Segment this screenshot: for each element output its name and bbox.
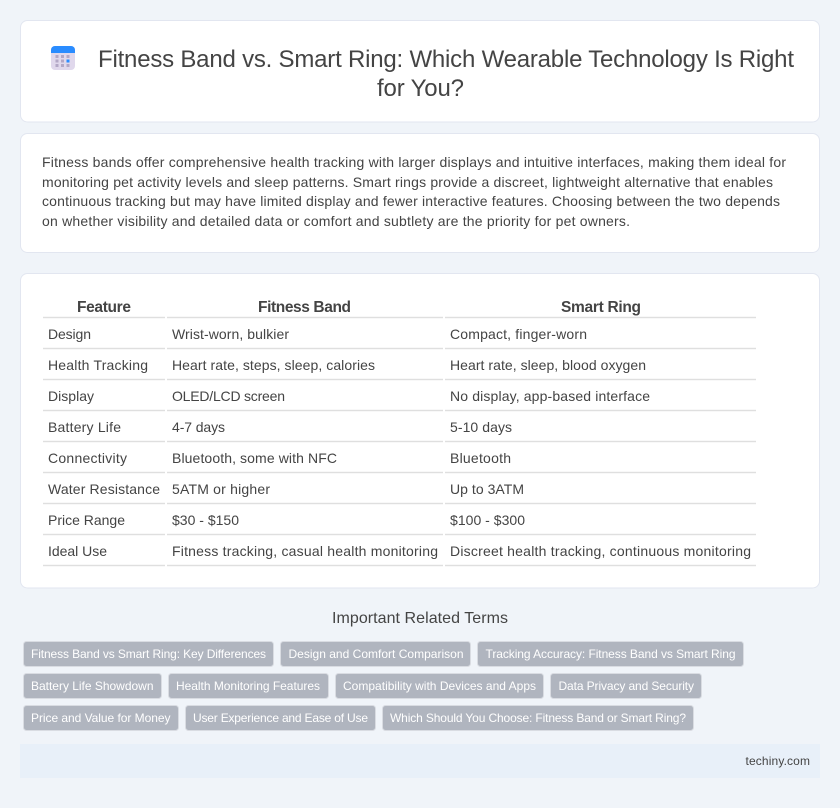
- row: health tracking: [48, 357, 646, 373]
- tag: [24, 706, 178, 730]
- tag: [186, 706, 376, 730]
- row: health tracking: Heart rate, sleep, blood oxygen: [450, 357, 646, 373]
- text block: introduction: monitoring pet activity levels and sleep patterns. Smart rings provide a discreet, lightweight alternative that enables: [42, 174, 773, 190]
- row: health tracking: Health Tracking: [48, 357, 148, 373]
- tag: [478, 642, 744, 666]
- panel: related term tags: [24, 642, 744, 730]
- heading: important related terms: Important Related Terms: [332, 610, 508, 627]
- table rule lines: [43, 317, 756, 566]
- row: display: [48, 388, 650, 404]
- tag: Health Monitoring Features: [176, 679, 320, 693]
- row: display: No display, app-based interface: [450, 388, 650, 404]
- tag: Fitness Band vs Smart Ring: Key Differences: [31, 647, 266, 661]
- footer: techiny.com: [746, 754, 810, 768]
- row: water resistance: Up to 3ATM: [450, 481, 524, 497]
- icon: calendar: [51, 46, 75, 70]
- title: for You?: [377, 75, 464, 102]
- row: display: OLED/LCD screen: [172, 388, 285, 404]
- title: Fitness Band vs. Smart Ring: Which Wearable Technology Is Right: [98, 46, 794, 73]
- table header row: Fitness Band: [258, 299, 351, 316]
- row: connectivity: Bluetooth, some with NFC: [172, 450, 337, 466]
- row: ideal use: Discreet health tracking, continuous monitoring: [450, 543, 751, 559]
- row: water resistance: [48, 481, 524, 497]
- text block: introduction: [42, 154, 786, 229]
- tag: Tracking Accuracy: Fitness Band vs Smart Ring: [486, 647, 736, 661]
- tag: [336, 674, 544, 698]
- table header row: [77, 299, 641, 316]
- tag: User Experience and Ease of Use: [193, 711, 368, 725]
- tag: [550, 674, 702, 698]
- row: price range: [48, 512, 525, 528]
- row: ideal use: [48, 543, 751, 559]
- tag: [24, 642, 274, 666]
- tag: Battery Life Showdown: [31, 679, 154, 693]
- row: ideal use: Fitness tracking, casual health monitoring: [172, 543, 438, 559]
- panel: title header: [20, 20, 820, 122]
- row: design: Wrist-worn, bulkier: [172, 326, 289, 342]
- row: battery life: [48, 419, 512, 435]
- table header row: Smart Ring: [561, 299, 641, 316]
- tag: Price and Value for Money: [31, 711, 170, 725]
- row: battery life: 5-10 days: [450, 419, 512, 435]
- text block: introduction: on whether visibility and detailed data or comfort and subtlety are the priority for pet owners.: [42, 213, 630, 229]
- row: design: Compact, finger-worn: [450, 326, 587, 342]
- tag: [280, 642, 470, 666]
- title: [98, 46, 794, 102]
- tag: [168, 674, 328, 698]
- row: price range: Price Range: [48, 512, 125, 528]
- row: price range: $100 - $300: [450, 512, 525, 528]
- row: connectivity: [48, 450, 511, 466]
- tag: Design and Comfort Comparison: [288, 647, 464, 661]
- row: ideal use: Ideal Use: [48, 543, 107, 559]
- panel: comparison table: [20, 274, 820, 588]
- tag: Data Privacy and Security: [558, 679, 694, 693]
- tag: [382, 706, 694, 730]
- footer: [20, 744, 820, 778]
- row: display: Display: [48, 388, 94, 404]
- row: health tracking: Heart rate, steps, sleep, calories: [172, 357, 375, 373]
- row: water resistance: 5ATM or higher: [172, 481, 270, 497]
- row: battery life: Battery Life: [48, 419, 121, 435]
- row: connectivity: Connectivity: [48, 450, 127, 466]
- text block: introduction: continuous tracking but may have limited display and fewer interactive features. Choosing between the two depends: [42, 193, 780, 209]
- row: design: [48, 326, 587, 342]
- tag: Compatibility with Devices and Apps: [343, 679, 536, 693]
- row: battery life: 4-7 days: [172, 419, 225, 435]
- row: price range: $30 - $150: [172, 512, 239, 528]
- text block: introduction: Fitness bands offer comprehensive health tracking with larger displays and intuitive interfaces, making them ideal for: [42, 154, 786, 170]
- row: design: Design: [48, 326, 91, 342]
- tag: Which Should You Choose: Fitness Band or Smart Ring?: [390, 711, 686, 725]
- table header row: Feature: [77, 299, 131, 316]
- panel: introduction paragraph: [20, 134, 820, 252]
- row: water resistance: Water Resistance: [48, 481, 160, 497]
- row: connectivity: Bluetooth: [450, 450, 511, 466]
- tag: [24, 674, 162, 698]
